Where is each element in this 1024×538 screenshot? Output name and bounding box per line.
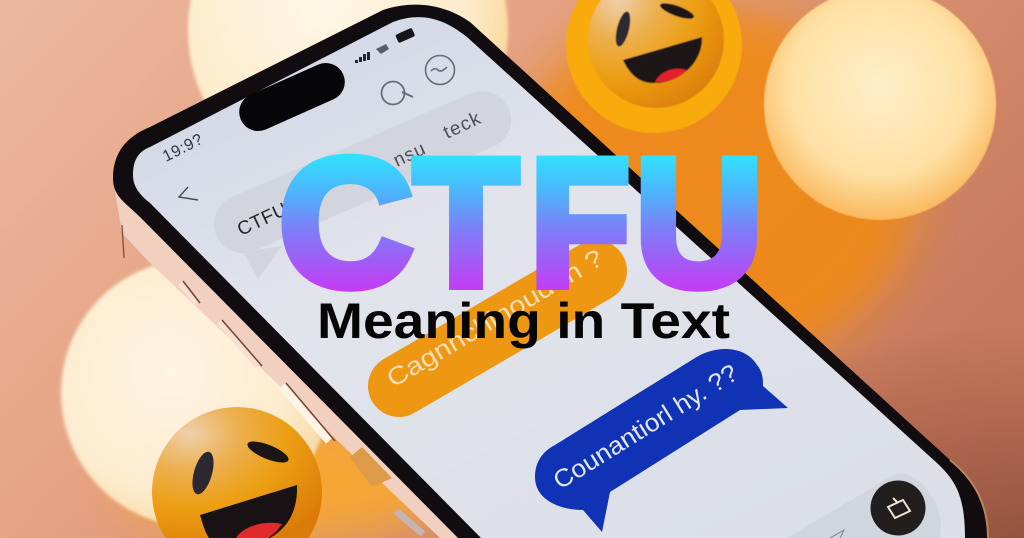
frame notch shadow: [350, 447, 392, 487]
emoji: bottom left: [152, 407, 322, 538]
title: CTFU: U: [635, 122, 763, 324]
glowing ball: top centre: [188, 0, 508, 190]
icon: search: [382, 82, 413, 104]
glowing ball: right: [764, 0, 996, 220]
title: CTFU: [279, 122, 763, 324]
grey message bubble: [234, 108, 485, 279]
status time: 19:9?: [160, 131, 206, 166]
phone copper edge: [950, 460, 988, 538]
emoji: top right: [566, 0, 742, 133]
orange floor glow: [505, 10, 915, 370]
title: CTFU: T: [414, 122, 518, 324]
bubble: blue: [535, 349, 788, 532]
bubble: orange: Cagnnchinoudun ?: [382, 244, 608, 393]
icon: messenger: [426, 56, 454, 84]
phone metal frame: [113, 170, 490, 538]
grey message bubble: CTFU: [234, 199, 291, 241]
status icons: [355, 28, 415, 63]
grey message bubble: nsu: [390, 138, 430, 172]
icon: paper arrow: [830, 530, 844, 538]
title: CTFU: C: [279, 122, 413, 324]
frame seam: [122, 225, 124, 258]
dynamic island: [233, 57, 351, 137]
glowing ball: lower left: [61, 259, 329, 527]
phone screen: [133, 17, 965, 538]
title: CTFU: F: [530, 122, 630, 324]
send button: [870, 480, 926, 536]
icon: back arrow: [179, 187, 198, 200]
subtitle: Meaning in Text: Meaning in Text: [317, 293, 730, 349]
bottom input bar: [787, 473, 941, 538]
lower left glow: [120, 422, 460, 538]
bubble: blue: Counantiorl hy. ??: [548, 359, 743, 495]
side buttons: [180, 281, 423, 534]
grey message bubble: teck: [440, 108, 485, 144]
